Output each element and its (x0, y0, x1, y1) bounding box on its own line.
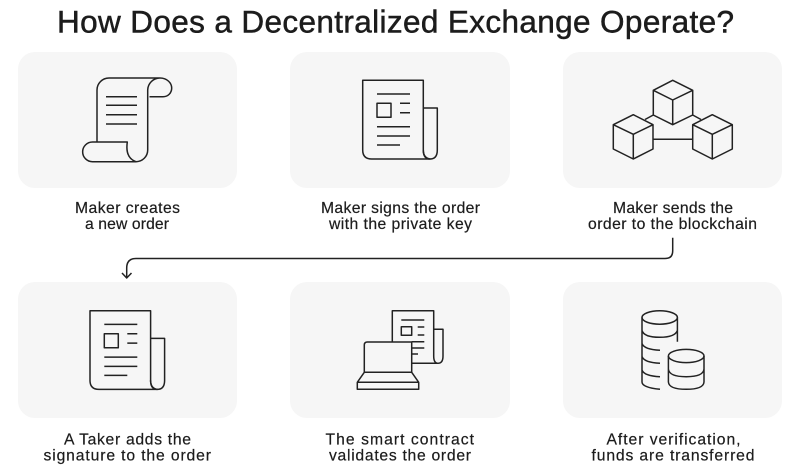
label (326, 431, 475, 464)
panel: maker signs order (290, 52, 510, 233)
label: validates the order (329, 448, 471, 464)
label (588, 200, 757, 233)
label: After verification, (606, 431, 740, 448)
icon: scroll (83, 78, 172, 162)
panel: funds transferred (563, 282, 782, 464)
label: with the private key (328, 216, 472, 233)
label (321, 200, 480, 233)
panel: maker creates order (18, 52, 237, 233)
icon: coin stacks (642, 311, 704, 389)
label: Maker creates (75, 200, 180, 217)
label: signature to the order (44, 448, 211, 464)
panel: taker adds signature (18, 282, 237, 464)
icon: laptop and document (357, 311, 443, 389)
icon: blockchain cubes (613, 80, 732, 159)
label: order to the blockchain (588, 216, 757, 233)
label (44, 431, 211, 464)
label (75, 200, 180, 233)
panel: smart contract validates (290, 282, 510, 464)
label: The smart contract (326, 431, 475, 448)
label: A Taker adds the (64, 431, 191, 448)
icon: document (363, 80, 437, 159)
panel: maker sends order (563, 52, 782, 233)
label: Maker sends the (613, 200, 733, 217)
arrow: to taker (122, 238, 673, 278)
title: How Does a Decentralized Exchange Operate? (57, 4, 734, 40)
label: funds are transferred (592, 448, 754, 464)
label: a new order (85, 216, 169, 233)
icon: document (90, 311, 165, 389)
label (592, 431, 754, 464)
label: Maker signs the order (321, 200, 480, 217)
